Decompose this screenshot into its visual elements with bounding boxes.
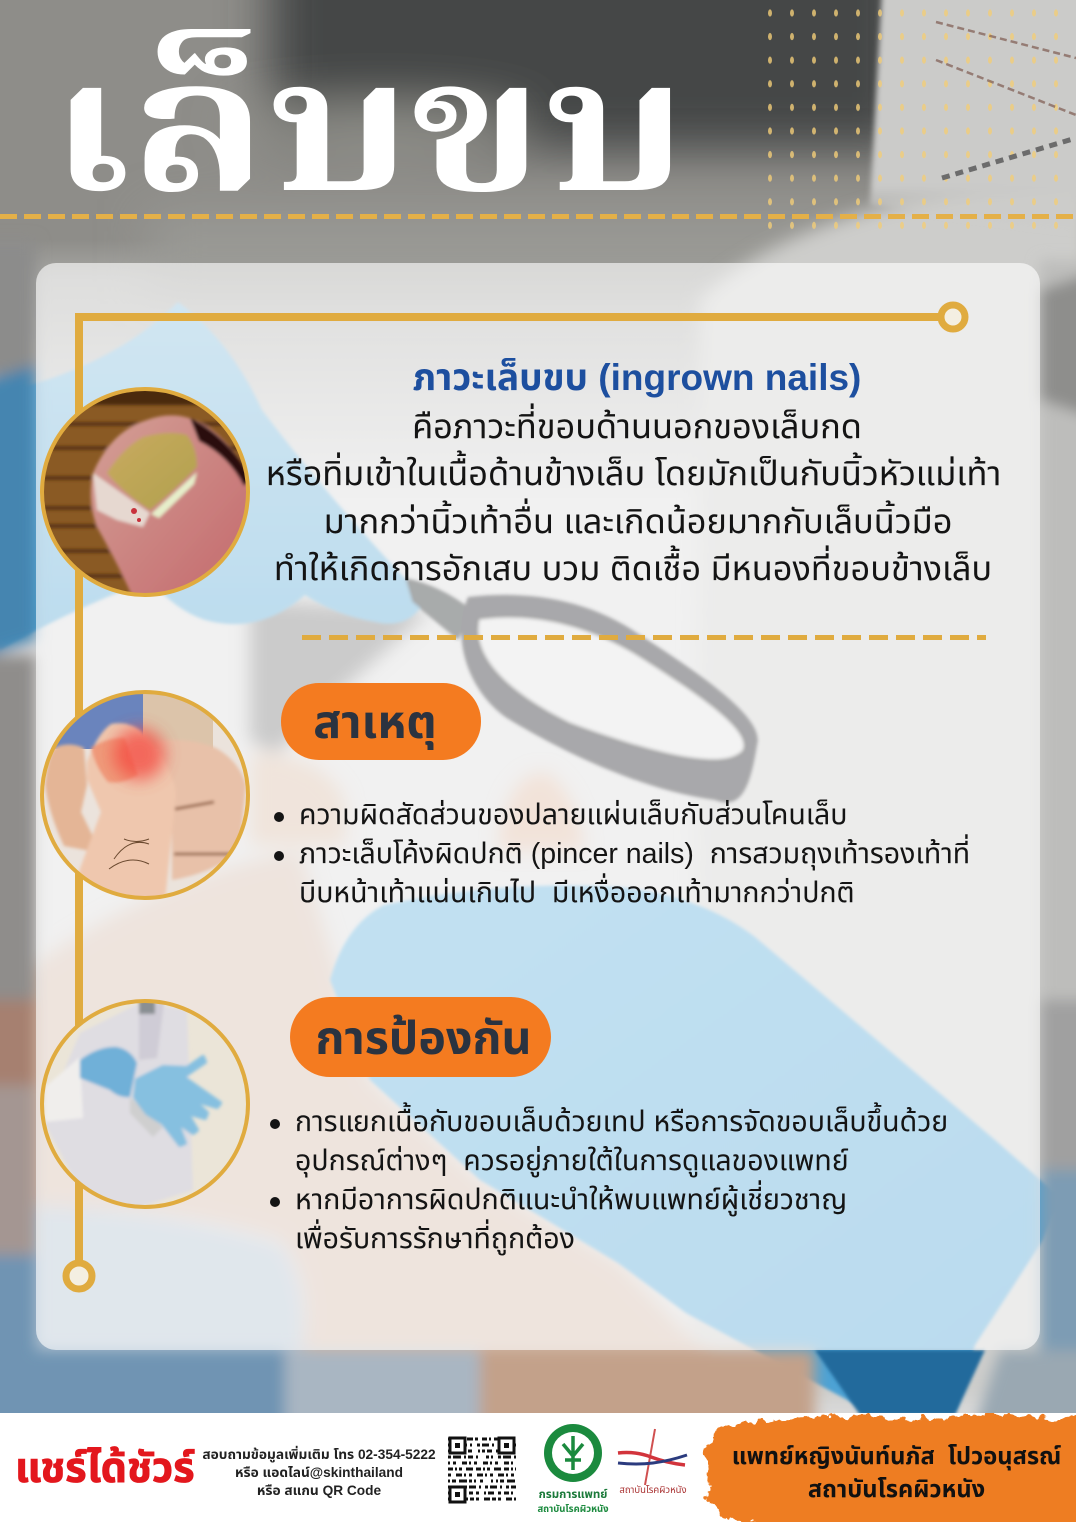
intro text block: มากกว่านิ้วเท้าอื่น และเกิดน้อยมากกับเล็บนิ้วมือ	[324, 503, 952, 541]
QR code	[448, 1436, 516, 1504]
prevention list: หากมีอาการผิดปกติแนะนำให้พบแพทย์ผู้เชี่ยวชาญ	[295, 1184, 847, 1216]
footer band	[0, 1413, 1076, 1522]
prevention list: เพื่อรับการรักษาที่ถูกต้อง	[295, 1223, 575, 1255]
Department of Medical Services logo	[537, 1424, 609, 1515]
translucent content panel	[36, 263, 1040, 1350]
title dashed rule	[0, 214, 1076, 219]
contact text: หรือ แอดไลน์@skinthailand	[235, 1465, 403, 1480]
magnifier ring	[461, 595, 758, 803]
intro text block: คือภาวะที่ขอบด้านนอกของเล็บกด	[412, 408, 862, 446]
brand logo text: แชร์ได้ชัวร์	[15, 1444, 195, 1491]
title: เล็บขบ	[51, 26, 687, 231]
causes list	[274, 799, 970, 909]
causes list: ความผิดสัดส่วนของปลายแผ่นเล็บกับส่วนโคนเล็บ	[299, 799, 847, 831]
heading pill: causes	[281, 683, 481, 760]
heading pill: prevention	[290, 997, 551, 1077]
strips outside panel	[0, 240, 1076, 1440]
Institute of Dermatology logo: สถาบันโรคผิวหนัง	[619, 1485, 687, 1496]
contact text: สอบถามข้อมูลเพิ่มเติม โทร 02-354-5222	[202, 1447, 436, 1462]
prevention list: การแยกเนื้อกับขอบเล็บด้วยเทป หรือการจัดขอบเล็บขึ้นด้วย	[295, 1106, 948, 1138]
prevention list: อุปกรณ์ต่างๆ ควรอยู่ภายใต้ในการดูแลของแพทย์	[295, 1145, 849, 1177]
heading pill: prevention: การป้องกัน	[315, 1012, 532, 1064]
orange brush banner	[702, 1413, 1076, 1522]
doctor name: แพทย์หญิงนันท์นภัส โปวอนุสรณ์ สถาบันโรคผิวหนัง	[732, 1444, 1061, 1503]
divider	[302, 635, 986, 640]
face mask stitch marks	[936, 20, 1076, 180]
Institute of Dermatology logo	[618, 1428, 688, 1496]
heading pill: causes: สาเหตุ	[313, 696, 437, 748]
contact text: หรือ สแกน QR Code	[257, 1483, 381, 1498]
Department of Medical Services logo: กรมการแพทย์	[539, 1487, 608, 1501]
causes list: บีบหน้าเท้าแน่นเกินไป มีเหงื่อออกเท้ามากกว่าปกติ	[299, 877, 855, 909]
upper glove	[0, 302, 425, 650]
intro text block	[266, 357, 1001, 588]
photo: ingrown toenail	[40, 387, 250, 597]
decorative dot pattern	[768, 9, 1058, 230]
intro text block: หรือทิ่มเข้าในเนื้อด้านข้างเล็บ โดยมักเป็นกับนิ้วหัวแม่เท้า	[266, 455, 1001, 493]
gold timeline connector	[62, 302, 968, 1292]
lower glove	[330, 885, 1060, 1412]
photo: red swollen toe	[40, 690, 250, 900]
intro text block: ทำให้เกิดการอักเสบ บวม ติดเชื้อ มีหนองที่ขอบข้างเล็บ	[274, 550, 992, 588]
prevention list	[270, 1102, 948, 1256]
photo: doctor putting on gloves	[40, 999, 250, 1209]
contact text	[202, 1446, 436, 1498]
Department of Medical Services logo: สถาบันโรคผิวหนัง	[537, 1504, 609, 1515]
magnifier handle	[405, 578, 472, 640]
face mask	[868, 0, 1076, 207]
intro heading: ภาวะเล็บขบ (ingrown nails)	[413, 357, 861, 398]
causes list: ภาวะเล็บโค้งผิดปกติ (pincer nails) การสวมถุงเท้ารองเท้าที่	[299, 838, 970, 870]
